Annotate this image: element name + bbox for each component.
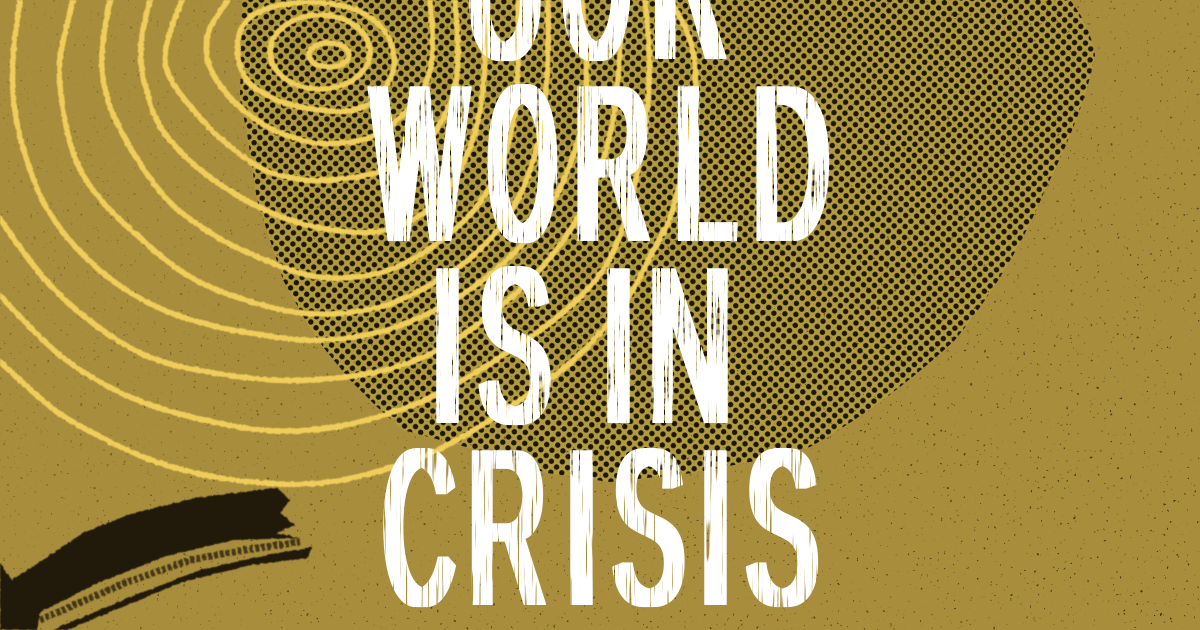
brush stroke xyxy=(0,488,312,630)
concentric tree rings xyxy=(0,0,696,484)
title line: IS IN: S xyxy=(479,221,550,469)
title line: IS IN: N xyxy=(648,223,732,470)
title line: WORLD: O xyxy=(489,38,556,287)
title line: IS IN: I xyxy=(431,221,464,469)
title line: IS IN xyxy=(431,221,732,470)
halftone blob xyxy=(240,0,1095,482)
title line: WORLD: D xyxy=(753,39,829,287)
title line: WORLD: W xyxy=(372,40,467,288)
title line: WORLD: R xyxy=(574,39,650,287)
title line: WORLD xyxy=(372,38,829,288)
title line: IS IN: I xyxy=(602,221,635,469)
title line: WORLD: L xyxy=(674,40,736,288)
title line: CRISIS xyxy=(384,403,818,630)
title line: OUR xyxy=(467,0,726,106)
title: Our World Is In Crisis xyxy=(372,0,829,630)
